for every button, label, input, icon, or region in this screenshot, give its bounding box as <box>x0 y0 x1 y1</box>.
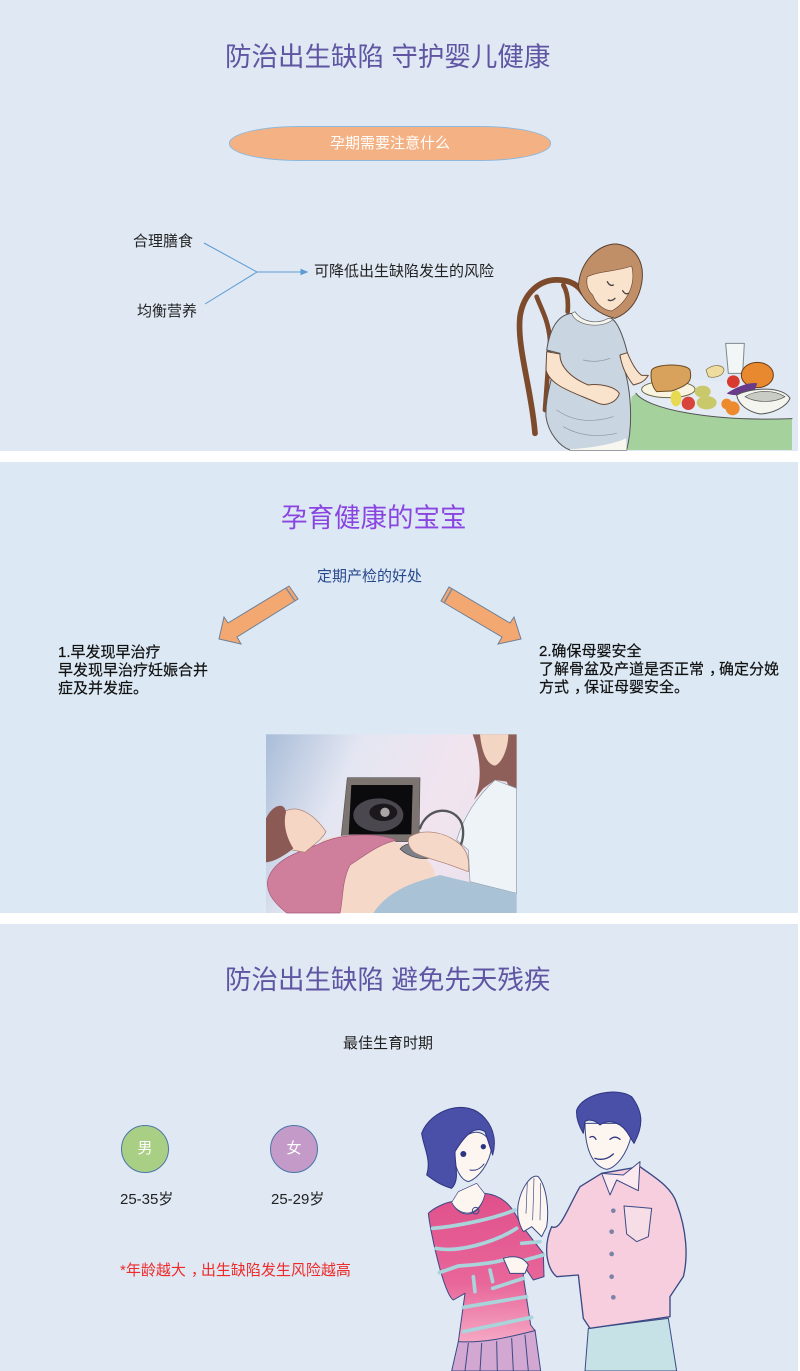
panel: pregnancy diet <box>0 0 798 451</box>
text block: mother and baby safety: 了解骨盆及产道是否正常 ，确定分娩 <box>539 661 779 678</box>
label: female age: 25-29岁 <box>271 1191 324 1208</box>
badge: female: 女 <box>286 1140 302 1157</box>
label: reduce risk: 可降低出生缺陷发生的风险 <box>314 263 494 280</box>
arms <box>546 352 619 404</box>
arrow: left to early detection <box>219 586 298 644</box>
patient head and hair <box>283 809 326 852</box>
chair <box>520 280 583 433</box>
sweater stripes <box>433 1210 543 1332</box>
background <box>266 734 517 913</box>
man trousers <box>585 1318 677 1371</box>
face <box>587 266 633 311</box>
woman head <box>453 1132 492 1182</box>
table <box>625 377 792 450</box>
text block: early detection: 症及并发症。 <box>58 680 148 697</box>
subheading: best age: 最佳生育时期 <box>343 1035 433 1052</box>
neck and necklace <box>452 1183 485 1213</box>
title: healthy baby: 孕育健康的宝宝 <box>281 503 466 533</box>
buttons <box>609 1208 616 1300</box>
title: birth defects prevention: 防治出生缺陷 守护婴儿健康 <box>225 42 550 72</box>
arrow: converging lines to risk text <box>204 243 307 304</box>
probe cable <box>420 811 463 847</box>
arrow: right to mother safety <box>441 587 521 644</box>
fish plate <box>737 389 790 414</box>
subheading: prenatal check benefits: 定期产检的好处 <box>317 568 422 585</box>
dress <box>546 313 631 450</box>
illustration: ultrasound scan <box>266 734 517 913</box>
doctor <box>473 734 517 803</box>
pumpkin <box>741 362 773 388</box>
illustration: pregnant woman at table <box>520 244 792 450</box>
panel: healthy baby <box>0 462 798 913</box>
text block: mother and baby safety: 2.确保母婴安全 <box>539 643 642 660</box>
monitor <box>341 778 420 842</box>
label: balanced diet: 合理膳食 <box>133 233 193 250</box>
text block: mother and baby safety <box>539 643 779 696</box>
collar <box>572 312 613 325</box>
panel: best childbearing age <box>0 924 798 1371</box>
pink top <box>267 835 397 913</box>
text block: early detection <box>58 644 208 697</box>
milk glass <box>726 343 744 373</box>
woman sweater <box>428 1193 544 1342</box>
man shirt and arm <box>547 1167 686 1328</box>
badge: male: 男 <box>137 1140 152 1157</box>
woman skirt <box>452 1330 541 1371</box>
raised hands <box>518 1176 548 1237</box>
man head <box>585 1123 632 1169</box>
title: avoid congenital disability: 防治出生缺陷 避免先天残疾 <box>225 965 550 995</box>
label: balanced nutrition: 均衡营养 <box>137 303 197 320</box>
warning note: *年龄越大 ，出生缺陷发生风险越高 <box>120 1262 351 1279</box>
pill: what to watch in pregnancy: 孕期需要注意什么 <box>330 135 450 152</box>
pill: what to watch in pregnancy <box>229 126 551 161</box>
dress folds <box>557 358 617 436</box>
white skirt corner <box>570 438 627 450</box>
plate and bread <box>642 381 695 398</box>
hair back <box>578 244 642 318</box>
pocket <box>624 1206 652 1242</box>
text block: early detection: 1.早发现早治疗 <box>58 644 161 661</box>
patient body and belly <box>322 835 435 913</box>
badge: male <box>121 1125 169 1173</box>
folded hand <box>503 1257 528 1273</box>
label: male age: 25-35岁 <box>120 1191 173 1208</box>
illustration: couple high five <box>422 1092 686 1371</box>
badge: female <box>270 1125 318 1173</box>
fruit and vegetables <box>706 366 724 377</box>
doctor hand and probe <box>400 843 432 859</box>
text block: early detection: 早发现早治疗妊娠合并 <box>58 662 208 679</box>
text block: mother and baby safety: 方式 ，保证母婴安全。 <box>539 679 689 696</box>
collar <box>602 1162 640 1195</box>
